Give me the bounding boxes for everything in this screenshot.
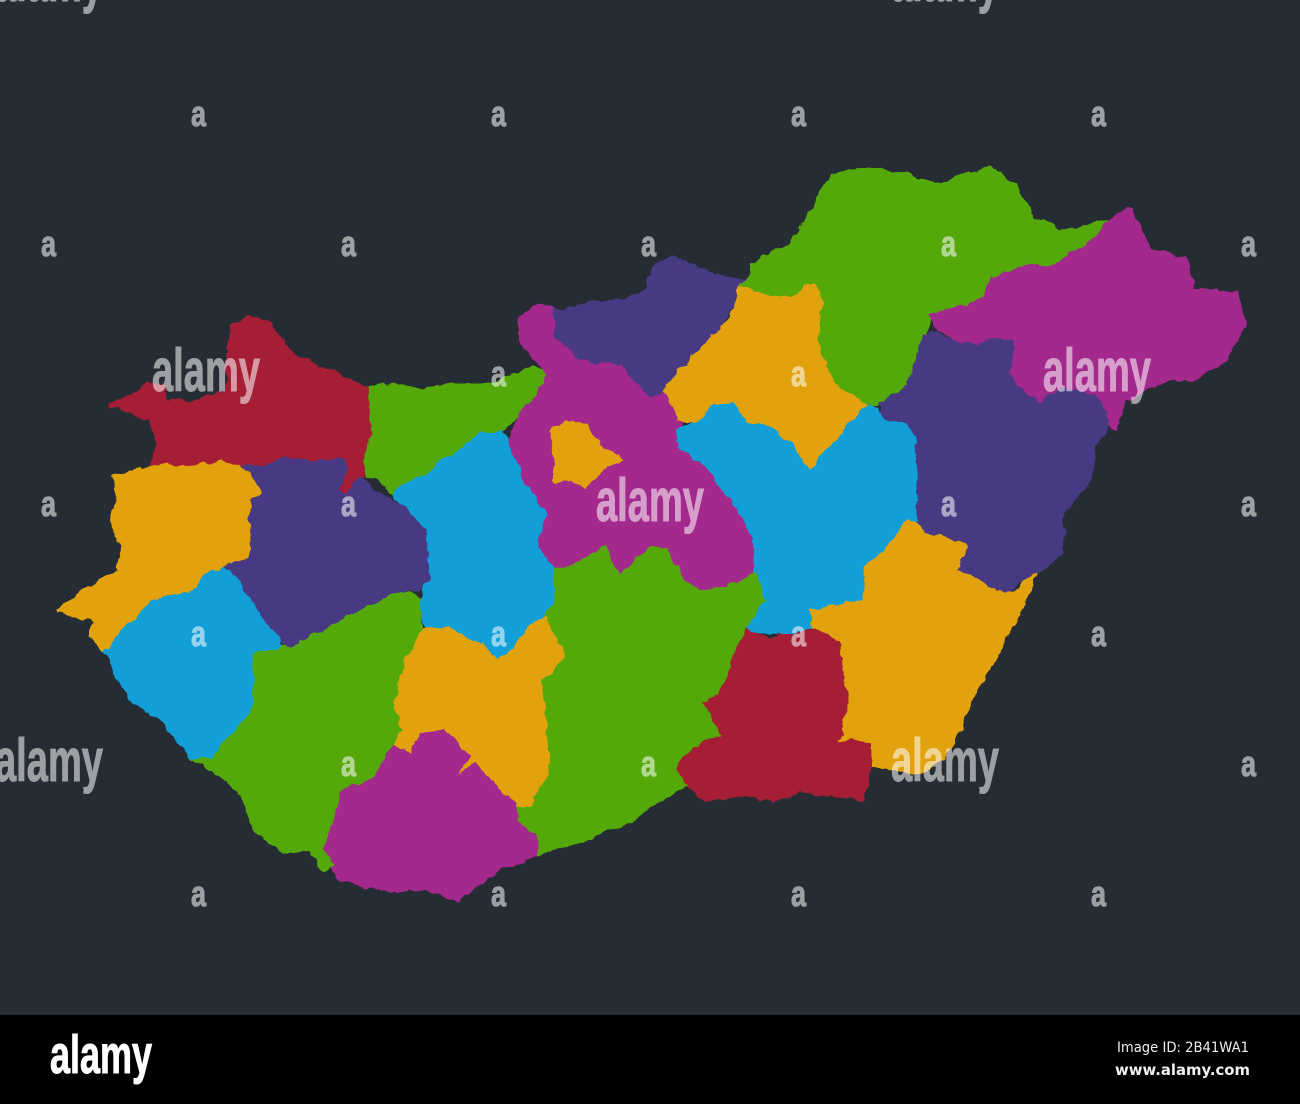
watermarks: a bbox=[941, 223, 957, 264]
county: Békés bbox=[810, 520, 1035, 775]
map of Hungary counties bbox=[58, 167, 1245, 900]
footer logo: alamy bbox=[50, 1025, 152, 1085]
watermarks: a bbox=[191, 873, 207, 914]
county: Bács-Kiskun bbox=[515, 548, 765, 855]
watermarks: alamy bbox=[596, 467, 704, 534]
watermarks: alamy bbox=[0, 727, 103, 794]
watermarks: a bbox=[1091, 93, 1107, 134]
watermarks: a bbox=[491, 613, 507, 654]
watermarks: a bbox=[491, 873, 507, 914]
county: Heves bbox=[665, 280, 870, 472]
county: Fejér bbox=[395, 432, 555, 660]
watermarks: a bbox=[1241, 223, 1257, 264]
county: Szabolcs-Szatmár-Bereg bbox=[930, 210, 1245, 430]
footer bar bbox=[0, 1015, 1300, 1104]
watermarks: a bbox=[641, 223, 657, 264]
watermarks: a bbox=[791, 613, 807, 654]
watermarks: a bbox=[1241, 743, 1257, 784]
county: Borsod-Abaúj-Zemplén bbox=[740, 167, 1110, 405]
watermarks: a bbox=[791, 873, 807, 914]
watermarks: a bbox=[41, 1003, 57, 1044]
county: Pest bbox=[508, 307, 755, 592]
watermarks: a bbox=[491, 353, 507, 394]
watermarks: a bbox=[41, 223, 57, 264]
watermarks: a bbox=[641, 1003, 657, 1044]
watermarks: a bbox=[341, 223, 357, 264]
watermarks: a bbox=[191, 613, 207, 654]
county: Jász-Nagykun-Szolnok bbox=[678, 405, 915, 635]
watermarks: a bbox=[791, 353, 807, 394]
watermarks: a bbox=[341, 743, 357, 784]
watermarks: a bbox=[191, 93, 207, 134]
watermarks: a bbox=[641, 743, 657, 784]
watermarks: alamy bbox=[1043, 337, 1151, 404]
watermarks: a bbox=[941, 483, 957, 524]
county: Győr-Moson-Sopron bbox=[110, 316, 373, 497]
watermarks: a bbox=[341, 483, 357, 524]
image id: Image ID: 2B41WA1 bbox=[1117, 1040, 1249, 1056]
county: Tolna bbox=[390, 618, 563, 805]
watermarks: alamy bbox=[152, 337, 260, 404]
watermarks: a bbox=[341, 1003, 357, 1044]
county: Hajdú-Bihar bbox=[880, 332, 1110, 593]
watermarks: a bbox=[1241, 1003, 1257, 1044]
watermarks: a bbox=[1091, 873, 1107, 914]
county: Vas bbox=[58, 462, 260, 650]
county: Baranya bbox=[322, 730, 535, 900]
county: Komárom-Esztergom bbox=[365, 368, 550, 495]
county: Nógrád bbox=[555, 257, 750, 395]
county: Csongrád bbox=[675, 628, 870, 800]
county: Veszprém bbox=[225, 458, 428, 645]
county: Zala bbox=[103, 565, 280, 758]
watermarks: alamy bbox=[891, 727, 999, 794]
watermarks: a bbox=[941, 1003, 957, 1044]
county: Somogy bbox=[190, 590, 420, 870]
watermarks: a bbox=[1241, 483, 1257, 524]
county: Budapest bbox=[550, 422, 620, 487]
watermarks: a bbox=[41, 483, 57, 524]
watermarks: a bbox=[791, 93, 807, 134]
watermarks: a bbox=[1091, 613, 1107, 654]
watermarks: a bbox=[491, 93, 507, 134]
website: www.alamy.com bbox=[1115, 1061, 1250, 1079]
